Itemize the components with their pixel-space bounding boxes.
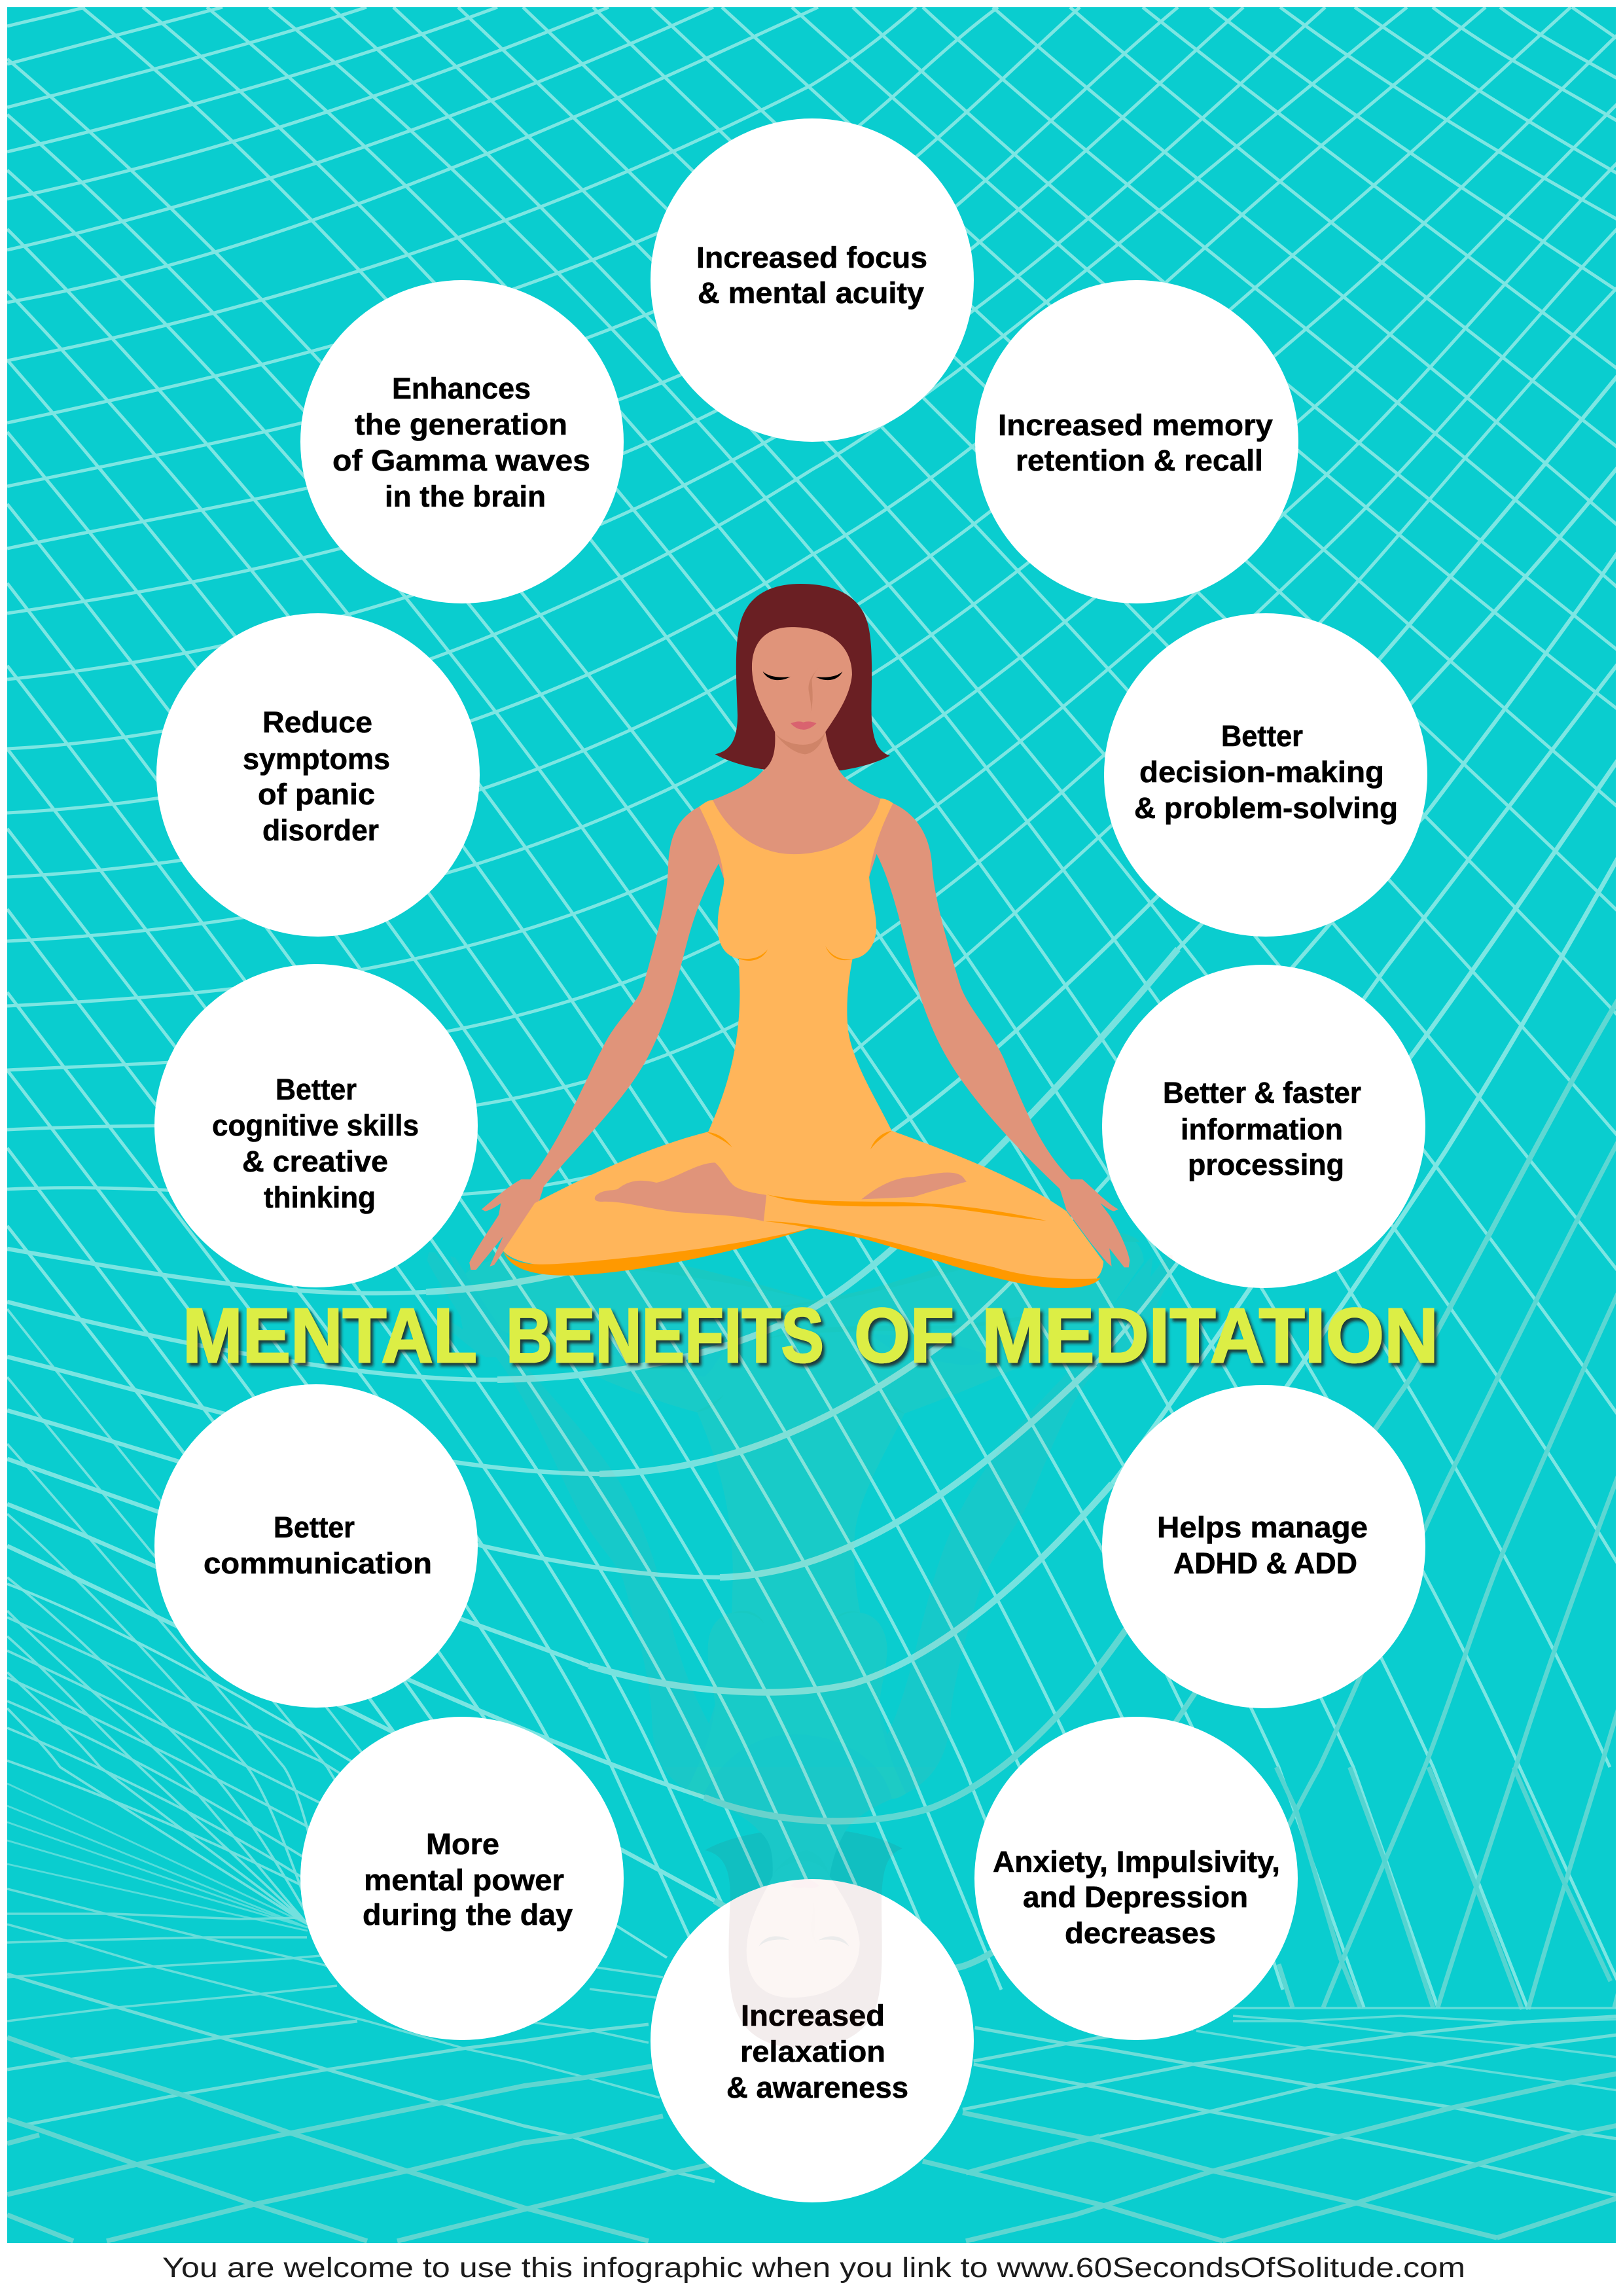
dress shadows [503,946,1100,1288]
faint mirrored reflection of the woman [427,1231,1173,2048]
panel: information processing: processing [1188,1148,1344,1181]
title [183,1293,1438,1379]
panel: decision-making [1104,613,1427,937]
panel: gamma waves: in the brain [385,480,546,513]
panel: cognitive skills: cognitive skills [212,1109,419,1142]
right side floor grid and wall [923,1767,1623,2241]
panel: gamma waves: the generation [355,408,567,441]
title: BENEFITS [506,1293,824,1379]
meditating woman illustration [469,584,1130,1288]
panel: anxiety [974,1717,1298,2040]
nose [808,667,820,713]
panel: mental power: mental power [364,1863,564,1897]
panel: panic disorder: symptoms [243,742,390,776]
panel: mental power: during the day [363,1898,573,1931]
title: OF [854,1293,954,1379]
panel: ADHD: Helps manage [1157,1511,1368,1544]
panel: decision-making: decision-making [1139,755,1384,789]
floor grid, near horizon [7,1889,663,2098]
panel: increased focus [651,118,974,442]
face [752,627,852,745]
neck shadow [775,732,825,754]
dress [503,798,1103,1282]
panel: increased focus: & mental acuity [698,276,924,310]
hair [715,584,890,770]
panel: cognitive skills: & creative [242,1145,388,1178]
footer attribution text: You are welcome to use this infographic when you link to www.60SecondsOfSolitude.com [162,2252,1465,2284]
panel: increased focus: Increased focus [696,241,927,274]
panel: information processing [1102,965,1425,1288]
panel: ADHD: ADHD & ADD [1173,1547,1357,1580]
panel: gamma waves [300,280,624,603]
left foot [595,1162,766,1221]
panel: mental power: More [426,1827,499,1861]
panel: panic disorder: Reduce [262,706,372,739]
panel: communication: communication [204,1547,432,1580]
panel: relaxation: relaxation [740,2035,885,2068]
panel: communication: Better [274,1511,355,1544]
panel: information processing: information [1181,1113,1343,1146]
panel: communication [154,1384,478,1708]
panel: cognitive skills: thinking [264,1181,376,1214]
panel: gamma waves: of Gamma waves [332,444,590,477]
panel: memory: Increased memory [998,408,1273,442]
panel: anxiety: and Depression [1023,1880,1248,1914]
panel: panic disorder: of panic [258,778,375,811]
panel: ADHD [1102,1385,1425,1708]
panel: anxiety: decreases [1065,1916,1216,1950]
panel: decision-making: & problem-solving [1134,791,1398,825]
shin highlight [767,1194,1046,1221]
panel: cognitive skills [154,964,478,1287]
panel: decision-making: Better [1221,719,1303,753]
panel: panic disorder [156,613,480,937]
upper wave right parts [891,375,1616,1132]
title: MEDITATION [982,1293,1438,1379]
left arm [469,806,721,1270]
panel: relaxation: Increased [741,1999,885,2032]
panel: information processing: Better & faster [1163,1076,1361,1109]
panel: mental power [300,1717,624,2040]
eyes [763,672,842,680]
neck and chest [699,732,893,880]
lips [791,721,817,730]
title: MENTAL [183,1293,477,1379]
panel: anxiety: Anxiety, Impulsivity, [993,1845,1280,1878]
panel: gamma waves: Enhances [392,372,531,405]
panel: relaxation [651,1879,974,2202]
panel: panic disorder: disorder [262,814,379,847]
right foot [861,1173,967,1199]
panel: memory: retention & recall [1016,444,1263,477]
panel: cognitive skills: Better [276,1073,357,1106]
panel: memory [975,280,1298,603]
right arm [875,803,1130,1267]
panel: relaxation: & awareness [726,2071,908,2104]
